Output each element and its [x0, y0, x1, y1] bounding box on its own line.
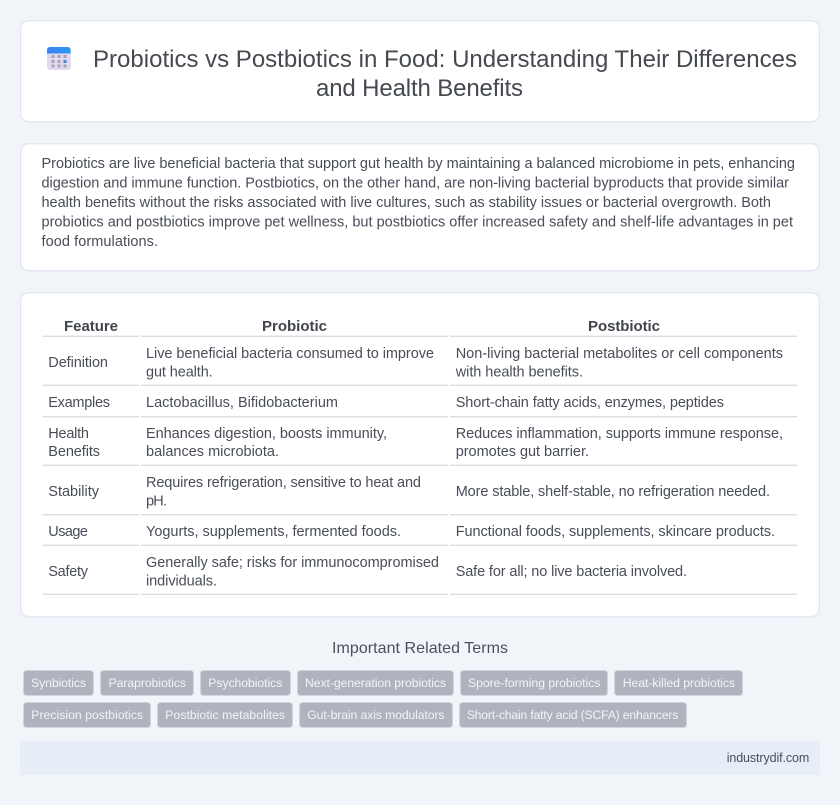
tag: Postbiotic metabolites: Postbiotic metabolites: [165, 708, 285, 722]
tag: Heat-killed probiotics: Heat-killed probiotics: [623, 676, 735, 690]
table header row: Postbiotic: [588, 318, 660, 335]
tag: Gut-brain axis modulators: Gut-brain axis modulators: [307, 708, 444, 722]
text block: introduction paragraph: digestion and immune function. Postbiotics, on the other hand, are non-living bacterial byproducts that provide similar: [42, 176, 789, 192]
footer source text: industrydif.com: [727, 751, 809, 765]
tag: Synbiotics: Synbiotics: [31, 676, 86, 690]
title: and Health Benefits: [316, 75, 523, 102]
tag: Spore-forming probiotics: Spore-forming probiotics: [468, 676, 600, 690]
title: [93, 46, 797, 102]
table row: examples: Lactobacillus, Bifidobacterium: [146, 395, 338, 411]
tag: Psychobiotics: [200, 670, 290, 696]
tag: Postbiotic metabolites: [158, 702, 292, 728]
table row: usage: Usage: [48, 524, 88, 540]
table row: health benefits: Benefits: [48, 444, 100, 460]
heading: important related terms: Important Related Terms: [332, 640, 508, 657]
table row: stability: Requires refrigeration, sensitive to heat and: [146, 475, 421, 491]
text block: introduction paragraph: probiotics and postbiotics improve pet wellness, but postbiotics offer increased safety and shelf-life advantages in pet: [42, 214, 793, 230]
table header row: Feature: [64, 318, 118, 335]
table row: safety: Generally safe; risks for immunocompromised: [146, 555, 439, 571]
panel: comparison table: [21, 293, 819, 617]
panel: introduction: [21, 144, 819, 271]
tag: Paraprobiotics: Paraprobiotics: [108, 676, 186, 690]
table row: definition: Definition: [48, 355, 108, 371]
tag: Short-chain fatty acid (SCFA) enhancers: Short-chain fatty acid (SCFA) enhancers: [467, 708, 678, 722]
table row: health benefits: Enhances digestion, boosts immunity,: [146, 426, 387, 442]
footer bar: [20, 741, 820, 775]
table row: definition: [48, 346, 783, 380]
table row: stability: [48, 475, 770, 510]
tag: Paraprobiotics: [100, 670, 194, 696]
table row: health benefits: balances microbiota.: [146, 444, 279, 460]
table row: definition: Live beneficial bacteria consumed to improve: [146, 346, 434, 362]
text block: introduction paragraph: [42, 156, 795, 250]
table row: health benefits: [48, 426, 783, 460]
table header row: Probiotic: [262, 318, 327, 335]
text block: introduction paragraph: food formulations.: [42, 234, 158, 250]
table row: safety: Safety: [48, 564, 89, 580]
table row: health benefits: promotes gut barrier.: [456, 444, 589, 460]
table row: definition: with health benefits.: [455, 364, 583, 380]
related term tags: [24, 670, 742, 728]
table row: stability: More stable, shelf-stable, no refrigeration needed.: [456, 484, 770, 500]
table row: health benefits: Reduces inflammation, supports immune response,: [456, 426, 783, 442]
table row: stability: pH.: [146, 494, 167, 510]
tag: Precision postbiotics: [24, 702, 150, 728]
table row: usage: [48, 524, 775, 540]
tag: Next-generation probiotics: [298, 670, 454, 696]
tag: Next-generation probiotics: Next-generation probiotics: [305, 676, 446, 690]
tag: Short-chain fatty acid (SCFA) enhancers: [460, 702, 686, 728]
table row: examples: Examples: [48, 395, 110, 411]
table row: safety: Safe for all; no live bacteria involved.: [456, 564, 687, 580]
text block: introduction paragraph: Probiotics are live beneficial bacteria that support gut health by maintaining a balanced microbiome in pets, enhancing: [42, 156, 795, 172]
table row: health benefits: Health: [48, 426, 89, 442]
tag: Heat-killed probiotics: [614, 670, 742, 696]
tag: Synbiotics: [24, 670, 94, 696]
title: Probiotics vs Postbiotics in Food: Understanding Their Differences: [93, 46, 797, 73]
table row: usage: Yogurts, supplements, fermented foods.: [146, 524, 401, 540]
panel: title header: [21, 21, 819, 122]
tag: Psychobiotics: Psychobiotics: [208, 676, 282, 690]
tag: Gut-brain axis modulators: [300, 702, 452, 728]
table header row: [64, 318, 660, 335]
tag: Spore-forming probiotics: [460, 670, 608, 696]
text block: introduction paragraph: health benefits without the risks associated with live cultures, such as stability issues or bacterial overgrowth. Both: [42, 195, 771, 211]
table row: definition: gut health.: [146, 364, 213, 380]
table row: examples: Short-chain fatty acids, enzymes, peptides: [456, 395, 724, 411]
table row: examples: [48, 395, 724, 411]
icon: calendar: [47, 47, 71, 70]
table row: definition: Non-living bacterial metabolites or cell components: [456, 346, 783, 362]
table row: usage: Functional foods, supplements, skincare products.: [456, 524, 775, 540]
table row: safety: individuals.: [146, 574, 217, 590]
tag: Precision postbiotics: Precision postbiotics: [31, 708, 143, 722]
table row: stability: Stability: [48, 484, 100, 500]
table row: safety: [48, 555, 687, 590]
